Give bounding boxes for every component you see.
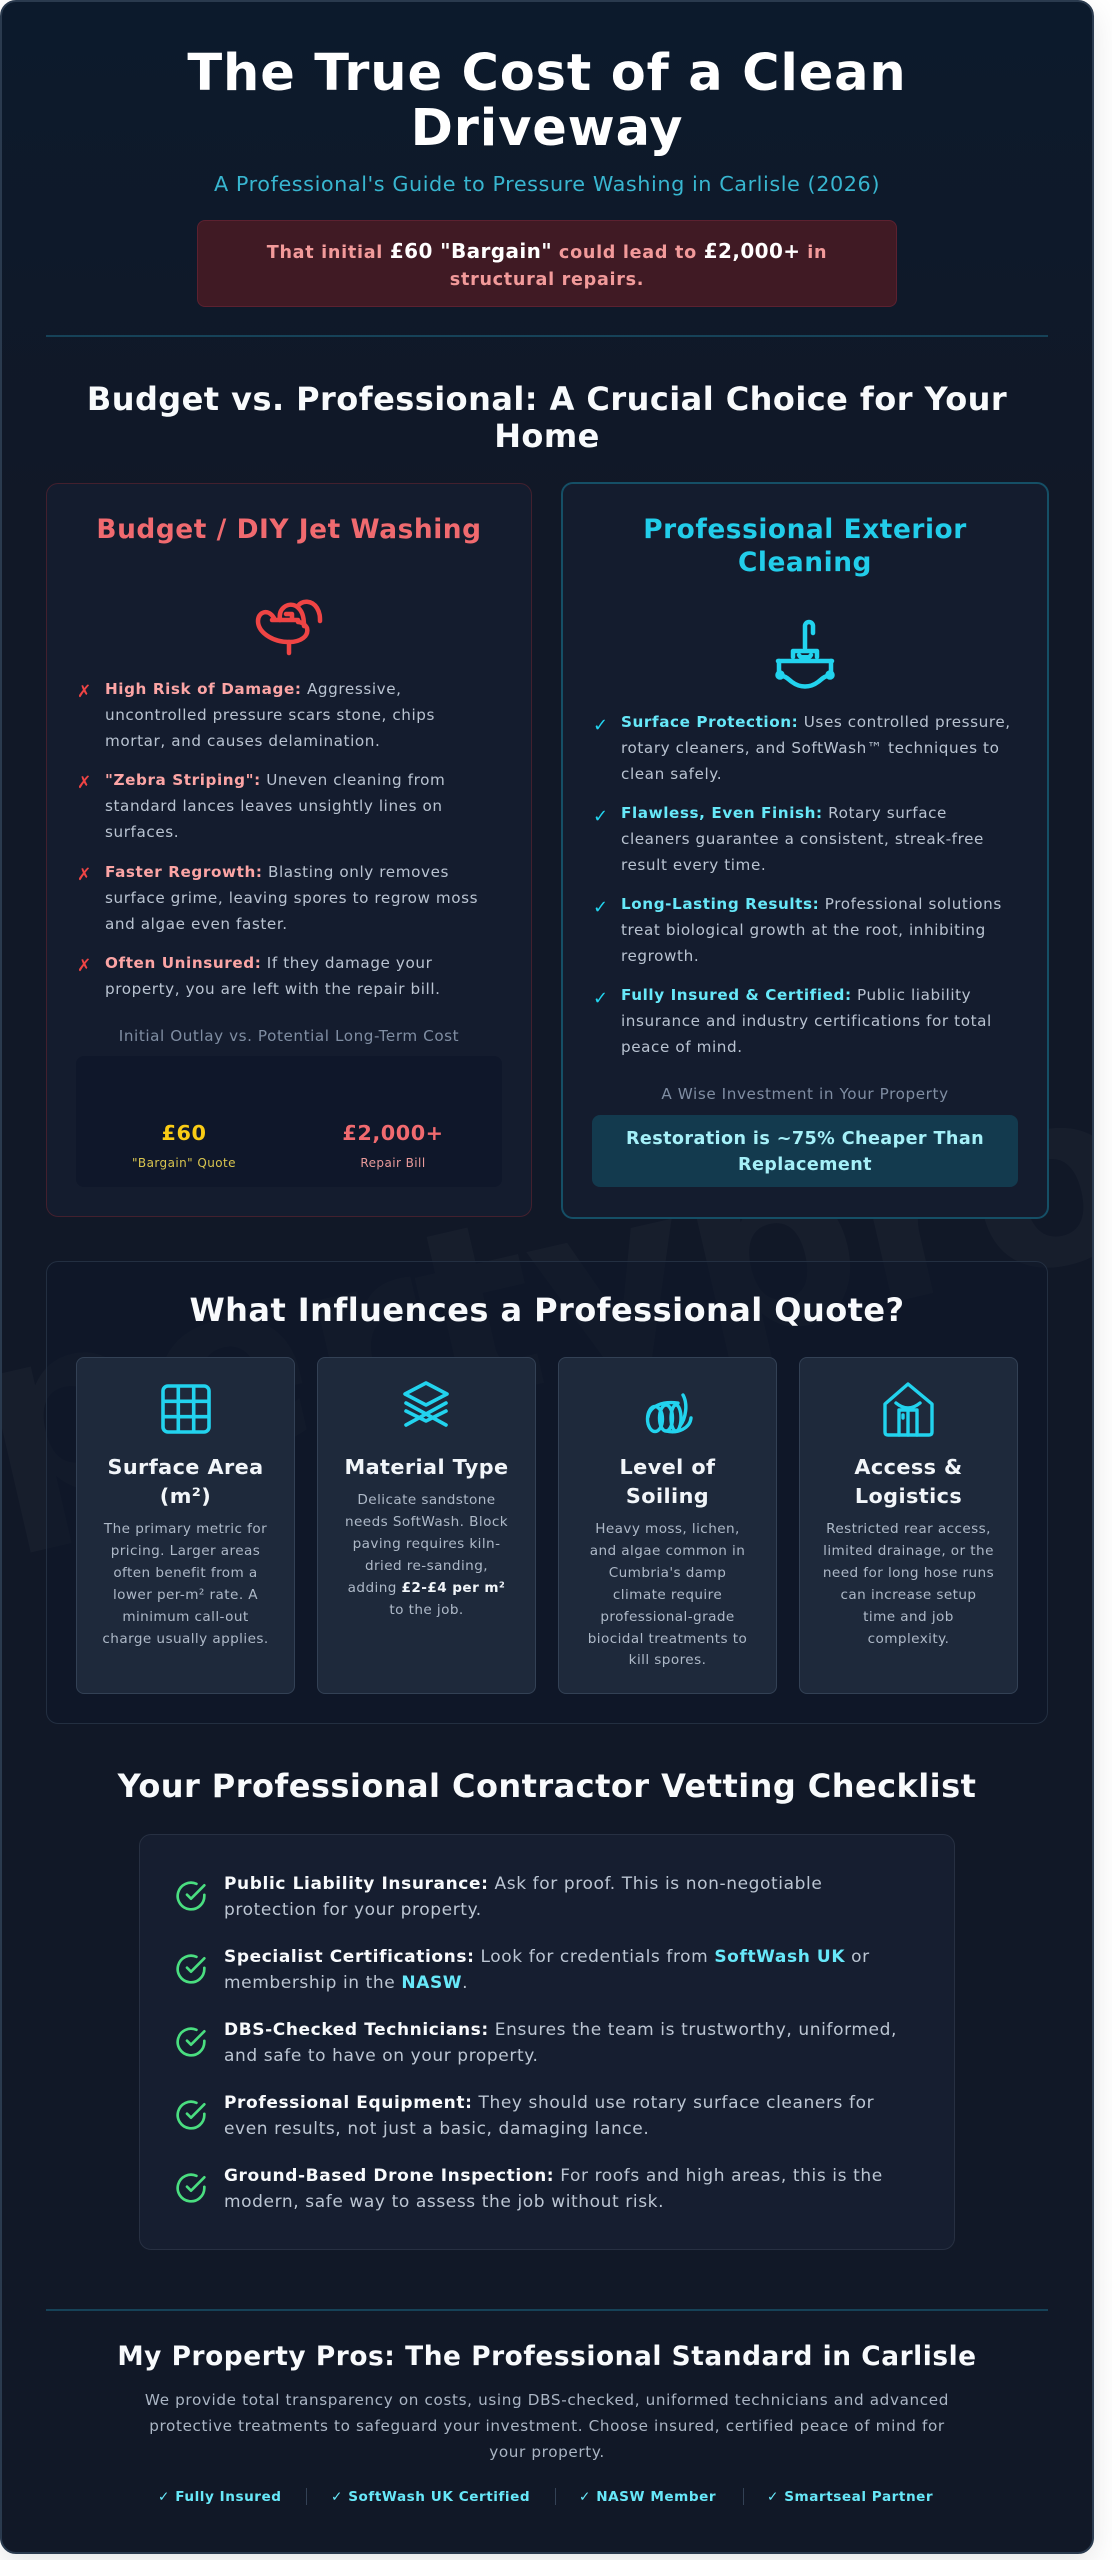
- item: insured: insurance and industry certifications for total: [621, 1012, 992, 1030]
- material description: needs SoftWash. Block: [345, 1514, 508, 1530]
- soiling description: biocidal treatments to: [588, 1631, 747, 1647]
- surface area description: The primary metric for: [104, 1521, 267, 1537]
- item: uninsured: Often Uninsured: If they damage your: [105, 954, 432, 972]
- soiling title: [620, 1455, 716, 1508]
- budget list: ✗: [77, 956, 91, 976]
- icon: grid: [161, 1384, 211, 1434]
- surface area title: (m²): [160, 1484, 211, 1508]
- item: flawless finish: result every time.: [621, 856, 766, 874]
- badge: NASW: ✓ NASW Member: [579, 2489, 716, 2505]
- callout text: [626, 1129, 984, 1175]
- item: surface protection: clean safely.: [621, 765, 722, 783]
- professional list: ✓: [593, 715, 608, 736]
- panel: professional: [561, 482, 1049, 1219]
- text: Professional Equipment: They should use rotary surface cleaners for: [224, 2093, 874, 2113]
- professional list: ✓: [593, 988, 608, 1009]
- text: [224, 2020, 897, 2066]
- section heading: budget vs professional: Budget vs. Professional: A Crucial Choice for Your: [87, 380, 1007, 418]
- professional list: [593, 713, 1011, 1056]
- item: faster regrowth: [77, 863, 478, 933]
- soiling title: Soiling: [626, 1484, 709, 1508]
- item: surface protection: rotary cleaners, and SoftWash™ techniques to: [621, 739, 999, 757]
- item: zebra striping: "Zebra Striping": Uneven cleaning from: [105, 771, 445, 789]
- item: uninsured: [77, 954, 441, 998]
- item: flawless finish: cleaners guarantee a consistent, streak-free: [621, 830, 984, 848]
- section heading: budget vs professional: [87, 380, 1007, 455]
- item: flawless finish: Flawless, Even Finish: Rotary surface: [621, 804, 947, 822]
- panel: budget DIY: [46, 483, 532, 1217]
- alert banner: [197, 220, 897, 307]
- soiling description: Cumbria's damp: [609, 1565, 726, 1581]
- text: DBS-Checked Technicians: Ensures the team is trustworthy, uniformed,: [224, 2020, 897, 2040]
- cost: 2000: £2,000+: [342, 1121, 444, 1145]
- budget list: ✗: [77, 682, 91, 702]
- soiling description: and algae common in: [590, 1543, 745, 1559]
- professional heading: [643, 514, 967, 578]
- text: and safe to have on your property.: [224, 2046, 538, 2066]
- title: Driveway: [411, 99, 683, 158]
- text: membership in the NASW.: [224, 1973, 468, 1993]
- item: zebra striping: standard lances leaves unsightly lines on: [105, 797, 443, 815]
- item: zebra striping: [77, 771, 445, 841]
- cost comparison box: [76, 1056, 502, 1187]
- icon: check: [176, 1881, 206, 1911]
- access description: need for long hose runs: [823, 1565, 994, 1581]
- card: access and logistics: [799, 1357, 1018, 1694]
- icon: damage: [256, 600, 322, 656]
- budget caption: Initial Outlay vs. Potential Long-Term Cost: [119, 1027, 459, 1045]
- item: high risk: High Risk of Damage: Aggressive,: [105, 680, 402, 698]
- panel: quote factors: [46, 1261, 1048, 1724]
- checklist row: drone: [175, 2163, 945, 2215]
- subtitle: A Professional's Guide to Pressure Washing in Carlisle (2026): [214, 172, 880, 196]
- material description: [345, 1492, 508, 1618]
- item: long lasting: Long-Lasting Results: Professional solutions: [621, 895, 1002, 913]
- access description: limited drainage, or the: [823, 1543, 994, 1559]
- text: [224, 1874, 822, 1920]
- card: level of soiling: [558, 1357, 777, 1694]
- budget list: ✗: [77, 773, 91, 793]
- material description: to the job.: [389, 1602, 464, 1618]
- card: surface area: [76, 1357, 295, 1694]
- item: long lasting: treat biological growth at the root, inhibiting: [621, 921, 986, 939]
- professional list: ✓: [593, 897, 608, 918]
- soiling description: [588, 1521, 747, 1668]
- access description: [823, 1521, 994, 1647]
- soiling description: professional-grade: [600, 1609, 735, 1625]
- item: high risk: uncontrolled pressure scars stone, chips: [105, 706, 435, 724]
- icon: check: [176, 2027, 206, 2057]
- badge: insured: ✓ Fully Insured: [158, 2489, 282, 2505]
- item: faster regrowth: and algae even faster.: [105, 915, 288, 933]
- icon: check: [176, 2100, 206, 2130]
- card: material type: [317, 1357, 536, 1694]
- budget list: ✗: [77, 865, 91, 885]
- text: Ground-Based Drone Inspection: For roofs and high areas, this is the: [224, 2166, 883, 2186]
- item: zebra striping: surfaces.: [105, 823, 179, 841]
- callout text: Restoration is ~75% Cheaper Than: [626, 1129, 984, 1149]
- soiling description: climate require: [613, 1587, 722, 1603]
- access description: can increase setup: [841, 1587, 976, 1603]
- panel: checklist: [139, 1834, 955, 2250]
- checklist heading: Your Professional Contractor Vetting Checklist: [118, 1767, 976, 1805]
- surface area title: [107, 1455, 264, 1508]
- trust badges: [150, 2484, 950, 2510]
- material description: paving requires kiln-: [353, 1536, 500, 1552]
- title: [187, 44, 907, 158]
- restoration callout: [592, 1115, 1018, 1187]
- checklist row: certifications: [176, 1947, 870, 1993]
- item: high risk: mortar, and causes delamination.: [105, 732, 380, 750]
- soiling description: kill spores.: [629, 1652, 706, 1668]
- surface area description: charge usually applies.: [102, 1631, 269, 1647]
- alert text: structural repairs.: [450, 270, 644, 290]
- item: surface protection: [593, 713, 1011, 783]
- item: insured: peace of mind.: [621, 1038, 743, 1056]
- item: faster regrowth: surface grime, leaving spores to regrow moss: [105, 889, 478, 907]
- footer paragraph: We provide total transparency on costs, using DBS-checked, uniformed technicians and advanced: [145, 2391, 949, 2409]
- item: long lasting: [593, 895, 1002, 965]
- item: insured: [593, 986, 992, 1056]
- icon: moss: [646, 1393, 693, 1434]
- access description: Restricted rear access,: [826, 1521, 991, 1537]
- item: faster regrowth: Faster Regrowth: Blasting only removes: [105, 863, 449, 881]
- item: flawless finish: [593, 804, 984, 874]
- professional caption: A Wise Investment in Your Property: [661, 1085, 949, 1103]
- surface area description: lower per-m² rate. A: [113, 1587, 258, 1603]
- badge: smartseal: ✓ Smartseal Partner: [767, 2489, 933, 2505]
- icon: house: [883, 1382, 934, 1437]
- text: even results, not just a basic, damaging lance.: [224, 2119, 649, 2139]
- alert text: That initial £60 "Bargain" could lead to £2,000+ in: [267, 239, 827, 263]
- text: modern, safe way to assess the job without risk.: [224, 2192, 664, 2212]
- access title: Access &: [854, 1455, 963, 1479]
- checklist row: equipment: [176, 2093, 874, 2139]
- item: long lasting: regrowth.: [621, 947, 699, 965]
- quote heading: What Influences a Professional Quote?: [189, 1291, 905, 1329]
- soiling title: Level of: [620, 1455, 715, 1479]
- material description: adding £2-£4 per m²: [348, 1580, 505, 1596]
- item: high risk: [77, 680, 435, 750]
- text: protection for your property.: [224, 1900, 482, 1920]
- surface area description: minimum call-out: [122, 1609, 249, 1625]
- professional heading: Cleaning: [738, 547, 872, 578]
- icon: check: [176, 1954, 206, 1984]
- budget heading: Budget / DIY Jet Washing: [96, 514, 482, 545]
- checklist row: public liability: [176, 1874, 822, 1920]
- badge: softwash: ✓ SoftWash UK Certified: [331, 2489, 530, 2505]
- professional heading: Professional Exterior: [643, 514, 967, 545]
- label: repair bill: Repair Bill: [360, 1156, 426, 1170]
- item: insured: Fully Insured & Certified: Public liability: [621, 986, 971, 1004]
- footer paragraph: protective treatments to safeguard your investment. Choose insured, certified peace of mind for: [149, 2417, 945, 2435]
- alert text: [266, 239, 827, 290]
- icon: rotary cleaner: [775, 620, 835, 689]
- surface area title: Surface Area: [107, 1455, 264, 1479]
- surface area description: pricing. Larger areas: [111, 1543, 260, 1559]
- access title: Logistics: [855, 1484, 962, 1508]
- title: The True Cost of a Clean: [187, 44, 907, 103]
- callout text: Replacement: [738, 1155, 872, 1175]
- label: bargain quote: "Bargain" Quote: [132, 1156, 236, 1170]
- soiling description: Heavy moss, lichen,: [595, 1521, 740, 1537]
- cost: 60: £60: [162, 1121, 206, 1145]
- section heading: budget vs professional: Home: [494, 417, 600, 455]
- access description: complexity.: [868, 1631, 949, 1647]
- text: Public Liability Insurance: Ask for proof. This is non-negotiable: [224, 1874, 822, 1894]
- access description: time and job: [863, 1609, 954, 1625]
- item: uninsured: property, you are left with the repair bill.: [105, 980, 441, 998]
- budget list: [77, 680, 478, 998]
- professional list: ✓: [593, 806, 608, 827]
- footer paragraph: [0, 2387, 1094, 2465]
- text: Specialist Certifications: Look for credentials from SoftWash UK or: [224, 1947, 870, 1967]
- surface area description: [102, 1521, 269, 1647]
- text: [224, 2163, 883, 2215]
- material description: Delicate sandstone: [357, 1492, 496, 1508]
- footer paragraph: your property.: [489, 2443, 605, 2461]
- text: [224, 2093, 874, 2139]
- icon: layers: [403, 1381, 449, 1427]
- material description: dried re-sanding,: [365, 1558, 488, 1574]
- icon: check: [175, 2172, 207, 2204]
- footer heading: My Property Pros: The Professional Standard in Carlisle: [117, 2341, 977, 2372]
- checklist row: DBS: [176, 2020, 897, 2066]
- access title: [854, 1455, 963, 1508]
- text: [224, 1947, 870, 1993]
- material title: Material Type: [344, 1455, 509, 1479]
- item: surface protection: Surface Protection: Uses controlled pressure,: [621, 713, 1011, 731]
- surface area description: often benefit from a: [113, 1565, 258, 1581]
